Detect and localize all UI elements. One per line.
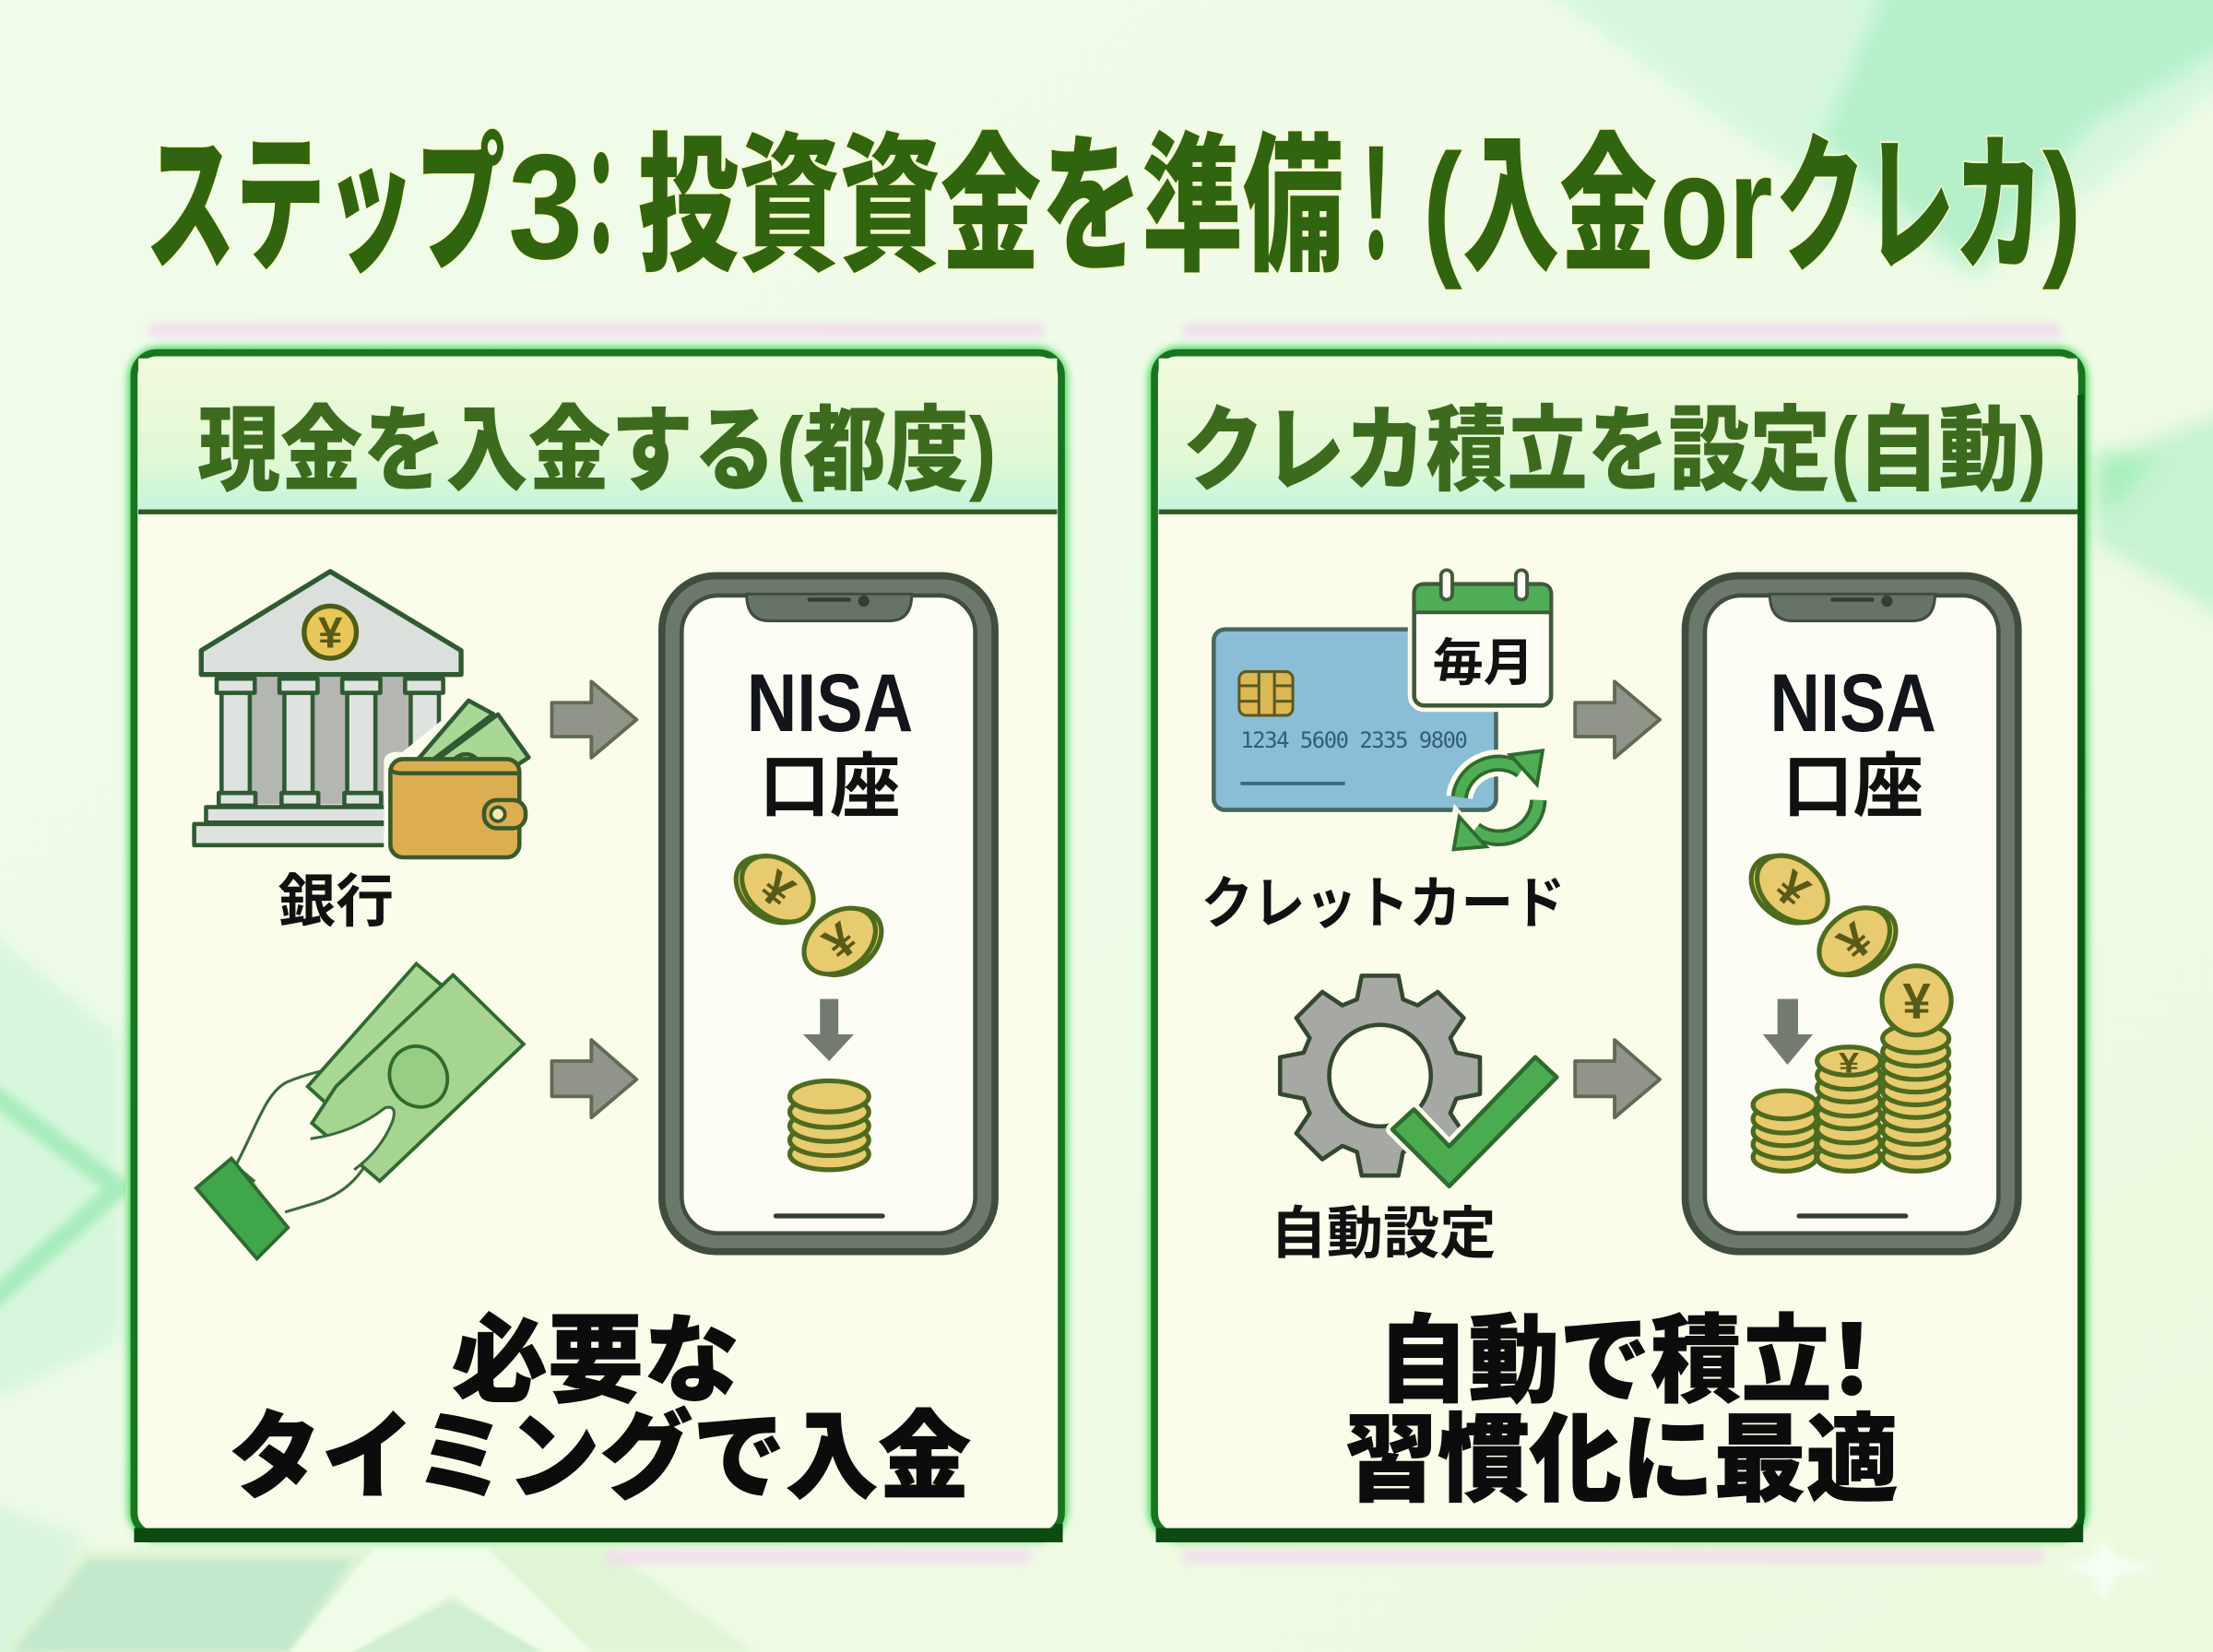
- caption: deposit when needed: [229, 1308, 971, 1511]
- title: ！: [1341, 124, 1412, 290]
- text: account: 口座: [759, 749, 901, 827]
- caption: deposit when needed: タイミングで入金: [229, 1404, 971, 1511]
- text: NISA: NISA: [747, 657, 913, 749]
- icon: falling yen coin: ¥: [1764, 861, 1819, 919]
- icon: falling yen coin: [791, 892, 894, 991]
- icon: falling yen coin: [1806, 891, 1909, 991]
- arrow: cash to phone: [551, 1040, 636, 1117]
- arrow: card to phone: [1575, 681, 1660, 758]
- panel header: クレカ積立を設定(自動): [1183, 399, 2046, 502]
- title: [146, 124, 2082, 290]
- icon: bank: [195, 572, 461, 845]
- phone: NISA account: [662, 575, 995, 1252]
- icon: gear with check mark: [1280, 975, 1556, 1186]
- icon: wallet with cash: [384, 699, 534, 861]
- icon: growing coin stacks: [1753, 966, 1951, 1171]
- icon: monthly calendar: [1414, 570, 1551, 705]
- panel header: [138, 359, 1057, 514]
- icon: falling yen coin: [723, 840, 826, 938]
- caption: deposit when needed: 必要な: [452, 1308, 740, 1415]
- caption: automatic, best for habit: ！: [1804, 1308, 1899, 1415]
- label: automatic setting: 自動設定: [1271, 1202, 1496, 1265]
- panel frame: [134, 353, 1061, 1538]
- icon: recurring arrows: [1450, 748, 1547, 852]
- icon: falling yen coin: [1738, 839, 1840, 939]
- icon: credit card: [1213, 630, 1496, 810]
- arrow: setting to phone: [1575, 1040, 1660, 1117]
- arrow: bank to phone: [551, 681, 636, 758]
- icon: monthly calendar: 毎月: [1433, 634, 1534, 691]
- caption: automatic, best for habit: 自動で積立: [1378, 1308, 1832, 1415]
- panel: cash deposit: [134, 353, 1061, 1538]
- icon: falling yen coin: ¥: [1828, 913, 1883, 971]
- icon: coin stack: [790, 1080, 869, 1170]
- title: 3: [508, 124, 583, 290]
- phone: NISA account with growing coins: [1686, 575, 2018, 1252]
- arrow: down to coin stack: [803, 999, 854, 1061]
- caption: automatic, best for habit: 習慣化に最適: [1345, 1407, 1899, 1514]
- title: (: [1423, 124, 1462, 290]
- title: ステップ: [146, 124, 505, 290]
- icon: hand giving cash: [196, 963, 524, 1258]
- icon: bank: ¥: [318, 609, 343, 658]
- icon: falling yen coin: ¥: [813, 913, 868, 972]
- caption: automatic, best for habit: [1345, 1308, 1899, 1514]
- label: credit card: クレットカード: [1201, 872, 1565, 935]
- panel header: [1159, 359, 2077, 514]
- panel header: 現金を入金する(都度): [197, 399, 997, 502]
- title: 投資資金を準備: [638, 124, 1343, 290]
- panel: credit card auto-investment: [1154, 353, 2084, 1538]
- title: ): [2042, 124, 2082, 290]
- icon: falling yen coin: ¥: [750, 861, 804, 919]
- yen mark on big coin: ¥: [1902, 973, 1931, 1030]
- title: ：: [566, 124, 636, 290]
- title: 入金: [1462, 124, 1657, 290]
- label: bank: 銀行: [278, 869, 394, 934]
- panel frame: [1154, 353, 2084, 1538]
- arrow: down to coin stacks: [1763, 999, 1813, 1065]
- yen mark on middle stack: ¥: [1839, 1045, 1859, 1079]
- icon: credit card: 1234 5600 2335 9800: [1240, 727, 1468, 753]
- text: account: 口座: [1782, 749, 1923, 827]
- title: クレカ: [1776, 124, 2043, 290]
- text: NISA: NISA: [1769, 657, 1936, 749]
- title: or: [1660, 124, 1772, 290]
